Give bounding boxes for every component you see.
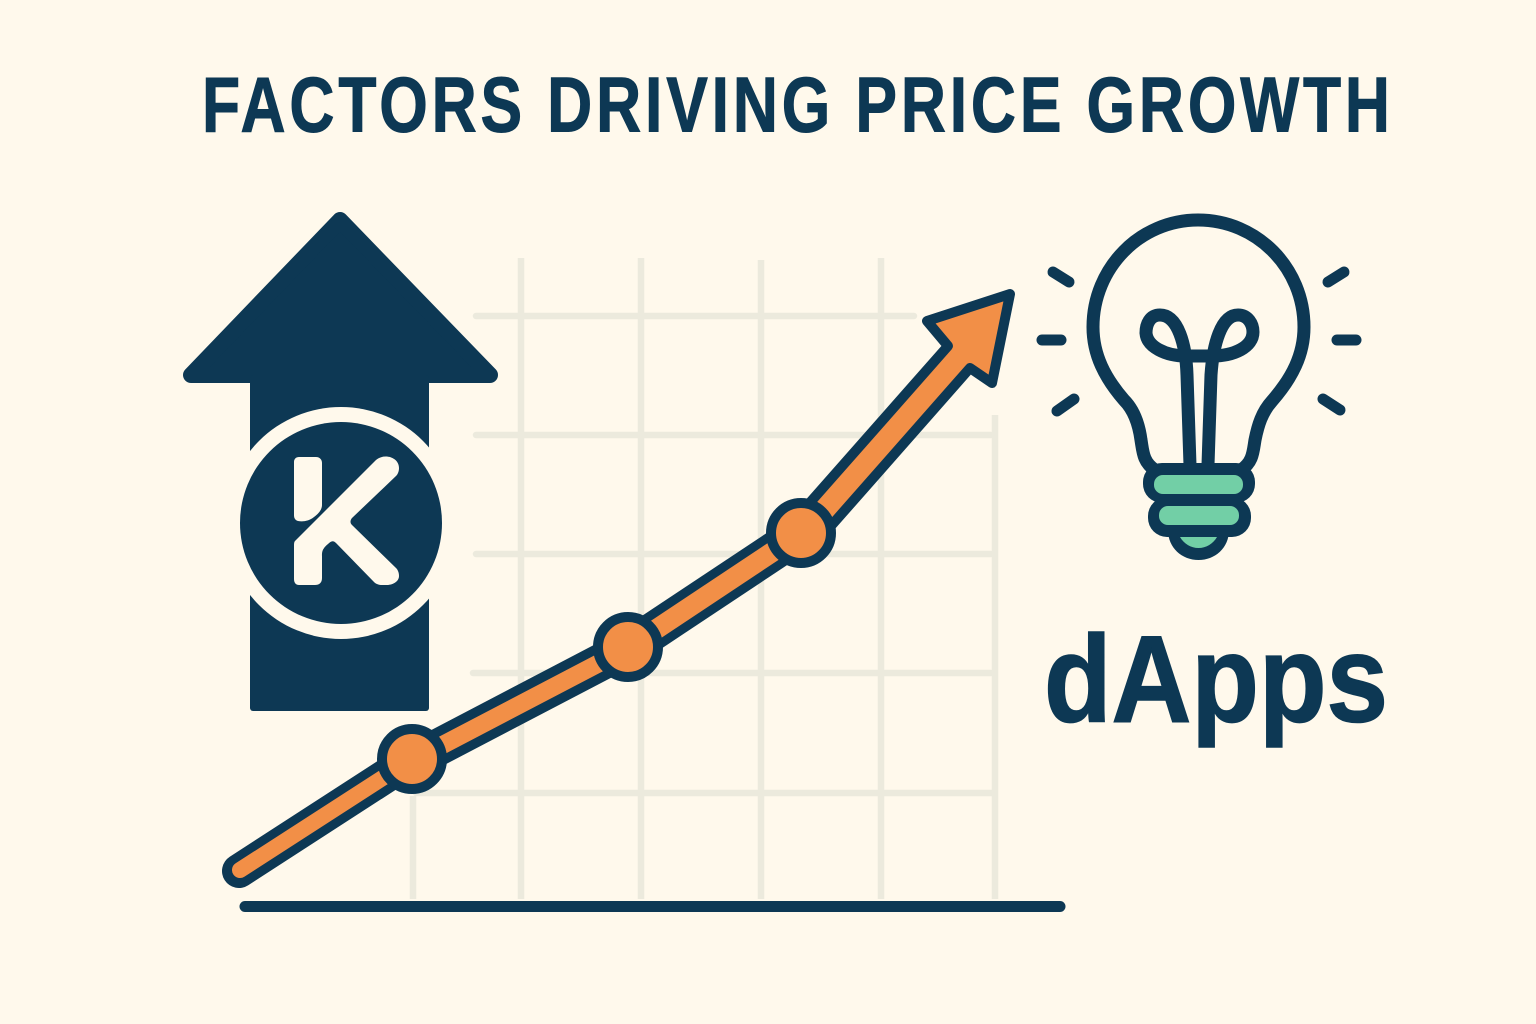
bulb glass outline xyxy=(1093,220,1304,470)
icon: up arrow with K coin xyxy=(191,220,490,711)
icon: light bulb xyxy=(1042,220,1356,560)
data point 1 xyxy=(382,729,442,789)
growth line chart arrow xyxy=(239,294,1010,871)
data point 3 xyxy=(771,503,831,563)
arrow head xyxy=(799,294,1010,535)
title: FACTORS DRIVING PRICE GROWTH xyxy=(202,61,1390,148)
baseline axis xyxy=(245,901,1060,912)
light rays xyxy=(1042,272,1356,411)
data point 2 xyxy=(598,617,658,677)
label: dApps: dApps xyxy=(1044,612,1388,748)
screw base xyxy=(1143,463,1255,548)
K coin xyxy=(240,422,442,624)
arrow head and shaft xyxy=(191,220,490,711)
line segments xyxy=(239,533,801,871)
cream ring gap xyxy=(225,407,457,639)
bulb cap xyxy=(1168,530,1229,560)
filament xyxy=(1146,315,1253,465)
